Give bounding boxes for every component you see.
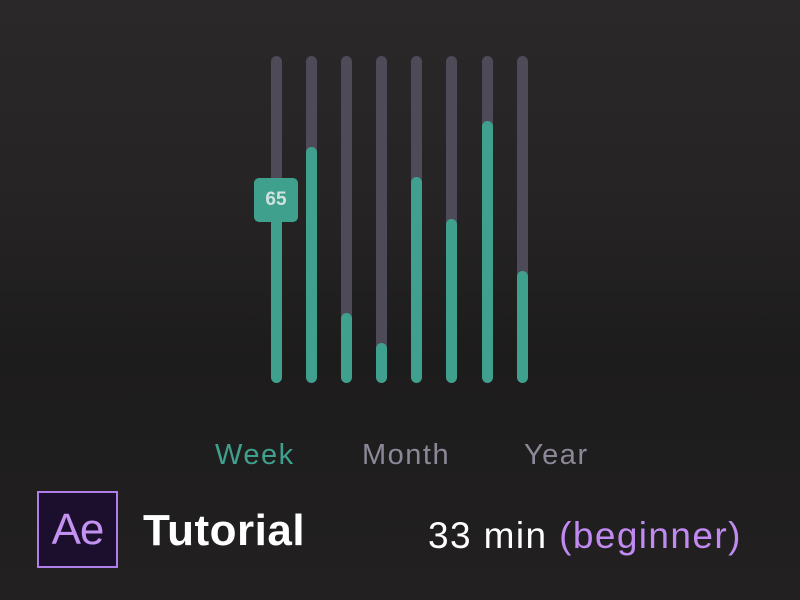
bar 7	[482, 56, 493, 383]
value label 65	[254, 178, 298, 222]
bar 1	[271, 56, 282, 383]
title: Tutorial: Tutorial	[143, 506, 305, 555]
tab: Month: Month	[362, 439, 450, 471]
bar 5	[411, 56, 422, 383]
bar 3	[341, 56, 352, 383]
duration text: 33 min (beginner)	[428, 515, 742, 556]
icon: Ae logo	[37, 491, 118, 568]
icon: Ae logo: Ae	[52, 505, 103, 554]
bar chart	[254, 56, 528, 383]
bar 6	[446, 56, 457, 383]
bar 2	[306, 56, 317, 383]
bar 8	[517, 56, 528, 383]
bar 4	[376, 56, 387, 383]
tab: Week: Week	[215, 439, 295, 471]
value label 65: 65	[265, 189, 287, 210]
tab: Year: Year	[524, 439, 589, 471]
